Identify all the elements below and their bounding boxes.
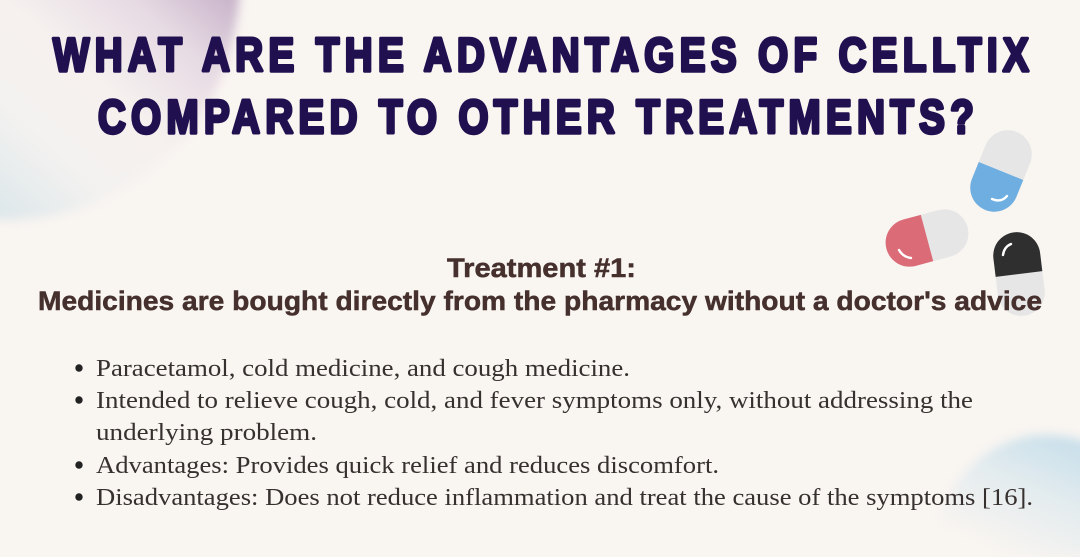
bullet 3: Advantages: Provides quick relief and reduces discomfort. bbox=[96, 452, 719, 479]
bullet 2: Intended to relieve cough, cold, and fever symptoms only, without addressing the bbox=[96, 387, 973, 414]
bullet 4: Disadvantages: Does not reduce inflammation and treat the cause of the symptoms [16]. bbox=[96, 484, 1033, 511]
bullet 2: underlying problem. bbox=[96, 419, 317, 446]
icon: red capsule bbox=[880, 204, 974, 272]
blob: bottom right bbox=[930, 435, 1080, 557]
icon: blue capsule bbox=[963, 123, 1039, 219]
title: WHAT ARE THE ADVANTAGES OF CELLTIX bbox=[53, 29, 1029, 82]
title bbox=[53, 29, 1029, 144]
icon: black capsule bbox=[991, 229, 1047, 319]
blob: top left bbox=[0, 0, 240, 220]
bullet 2 bbox=[75, 387, 973, 446]
subheading: Medicines are bought directly from the pharmacy without a doctor's advice bbox=[38, 286, 1042, 316]
title: COMPARED TO OTHER TREATMENTS? bbox=[98, 91, 974, 144]
subheading: Treatment #1: bbox=[447, 253, 636, 283]
bullet 1: Paracetamol, cold medicine, and cough medicine. bbox=[96, 355, 630, 382]
subheading bbox=[38, 253, 1042, 316]
bullet list bbox=[75, 355, 1033, 511]
